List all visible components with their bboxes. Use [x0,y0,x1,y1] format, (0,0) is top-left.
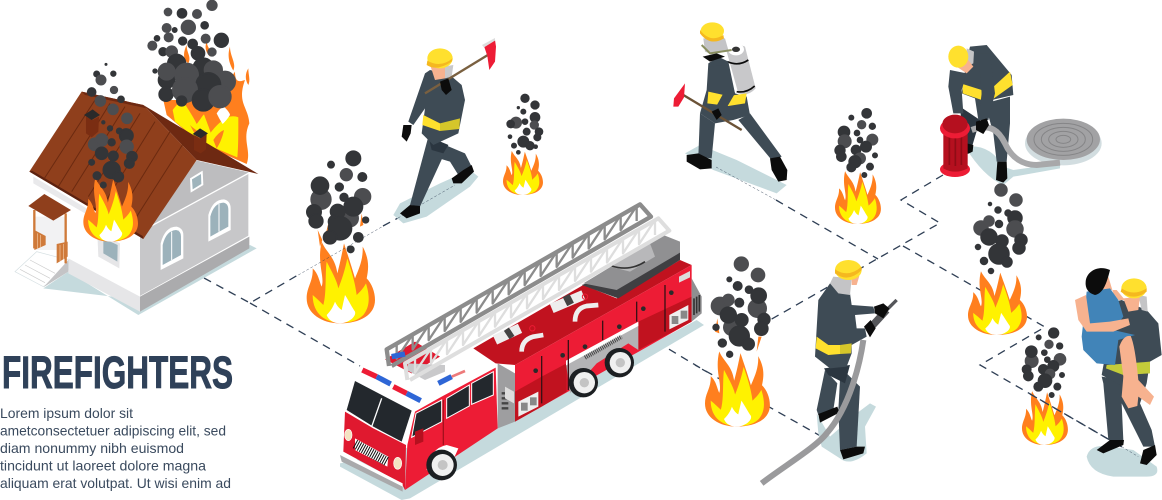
fire truck [340,204,704,500]
chimney right [193,128,208,153]
near arm [948,70,967,113]
helmet and mask [700,22,732,62]
gray pump section [498,363,515,428]
gable small window [190,171,203,193]
cab side [405,368,498,490]
gloves [864,303,889,337]
shadow [817,403,876,462]
rear platform [582,235,680,298]
boots [687,153,787,182]
body text: diam nonummy nibh euismod [0,440,184,456]
belt [422,115,460,131]
torso [962,45,1013,120]
rear wheel one [569,368,598,397]
left base [68,258,140,312]
firefighter carrying woman [1075,268,1162,477]
title: FIREFIGHTERS [2,347,233,398]
front ladder [405,218,669,380]
body side [515,265,692,422]
cab roof [355,340,496,410]
burning house [15,1,258,315]
wheel arch [566,322,638,393]
belt [963,72,1013,100]
hose [972,127,1060,165]
far arm [978,53,995,120]
legs [960,107,980,153]
legs [1102,377,1155,447]
big smoke cloud [148,1,235,111]
shadow [1087,446,1157,477]
body text: tincidunt ut laoreet dolore magna [0,458,206,474]
torso [408,70,465,145]
belt [816,337,852,355]
smoke [835,109,878,177]
glove [976,118,989,134]
body text: aliquam erat volutpat. Ut wisi enim ad [0,475,231,491]
arm [708,65,735,113]
helmet and head [1121,278,1148,312]
coat [815,283,875,368]
lower dark panels [515,297,692,422]
nozzle [868,310,887,330]
small flame centre top [503,94,543,195]
smoke [307,151,371,253]
boots [967,143,1007,183]
chimney smoke [88,64,132,131]
smoke [507,94,543,154]
legs [817,370,837,415]
smoke [711,257,770,357]
flame [307,213,375,323]
compartment dividers [542,285,665,403]
mirror [415,428,423,445]
headlights [345,429,402,469]
head and helmet [427,48,453,80]
ladder base [407,363,445,380]
boots [818,407,865,459]
roof [29,92,258,239]
porch [28,194,71,263]
flame [705,318,770,427]
lights on cab [362,354,465,401]
smoke [1022,328,1066,397]
shadow [393,170,478,223]
axe [673,83,742,130]
flame lower right [1022,328,1122,447]
side vents [518,271,690,417]
body text: Lorem ipsum dolor sit [0,405,133,421]
front wall window [97,233,120,268]
body text: ametconsectetuer adipiscing elit, sed [0,422,226,438]
roof flame smoke [89,128,137,188]
cab side windows [412,372,493,437]
body text [0,405,231,491]
grille [355,438,388,467]
torso [700,57,750,123]
compartment knobs [533,290,674,373]
left white wall [33,177,143,297]
firefighter with hose [762,260,897,483]
flame with smoke near house [298,151,383,323]
firefighter with axe [393,38,496,223]
windshield [347,381,412,442]
front leg [698,113,715,158]
house shadow [43,245,257,315]
woman [1075,268,1154,408]
axe [425,38,496,93]
cab front [343,412,406,490]
back roof flame [163,42,249,164]
legs [400,137,474,218]
boots [1097,440,1157,465]
head [948,46,974,73]
flame mid right [968,184,1027,335]
bumper [340,452,403,492]
smoke [974,184,1027,274]
back ladder [387,204,651,366]
rear end [692,278,702,322]
hose coil [1025,119,1102,165]
shadow [685,145,787,193]
shadow [965,146,1060,185]
oxygen tank [727,43,756,94]
hydrant [940,115,970,177]
gable wall [140,161,248,297]
front wheel [426,445,458,480]
flame near truck rear [705,257,770,427]
head and helmet [830,260,862,295]
gloves [402,78,452,142]
connecting dashed route lines [204,175,1122,447]
firefighter with oxygen tank [673,22,787,200]
torso [1102,300,1162,387]
body top [473,260,692,365]
rear wheel two [605,348,634,377]
truck shadow [340,320,704,500]
belt [707,92,747,106]
flame top centre right [835,109,881,224]
belt [1106,362,1150,375]
hose [762,340,863,483]
glove [712,108,722,120]
top valves [495,294,598,352]
roof flame [83,178,138,242]
chimney left [84,109,100,137]
firefighter at hydrant [940,45,1102,185]
arched window two [208,199,231,242]
arched window one [161,227,183,270]
steps [15,252,68,287]
gable base [140,237,249,312]
back leg [738,113,782,160]
